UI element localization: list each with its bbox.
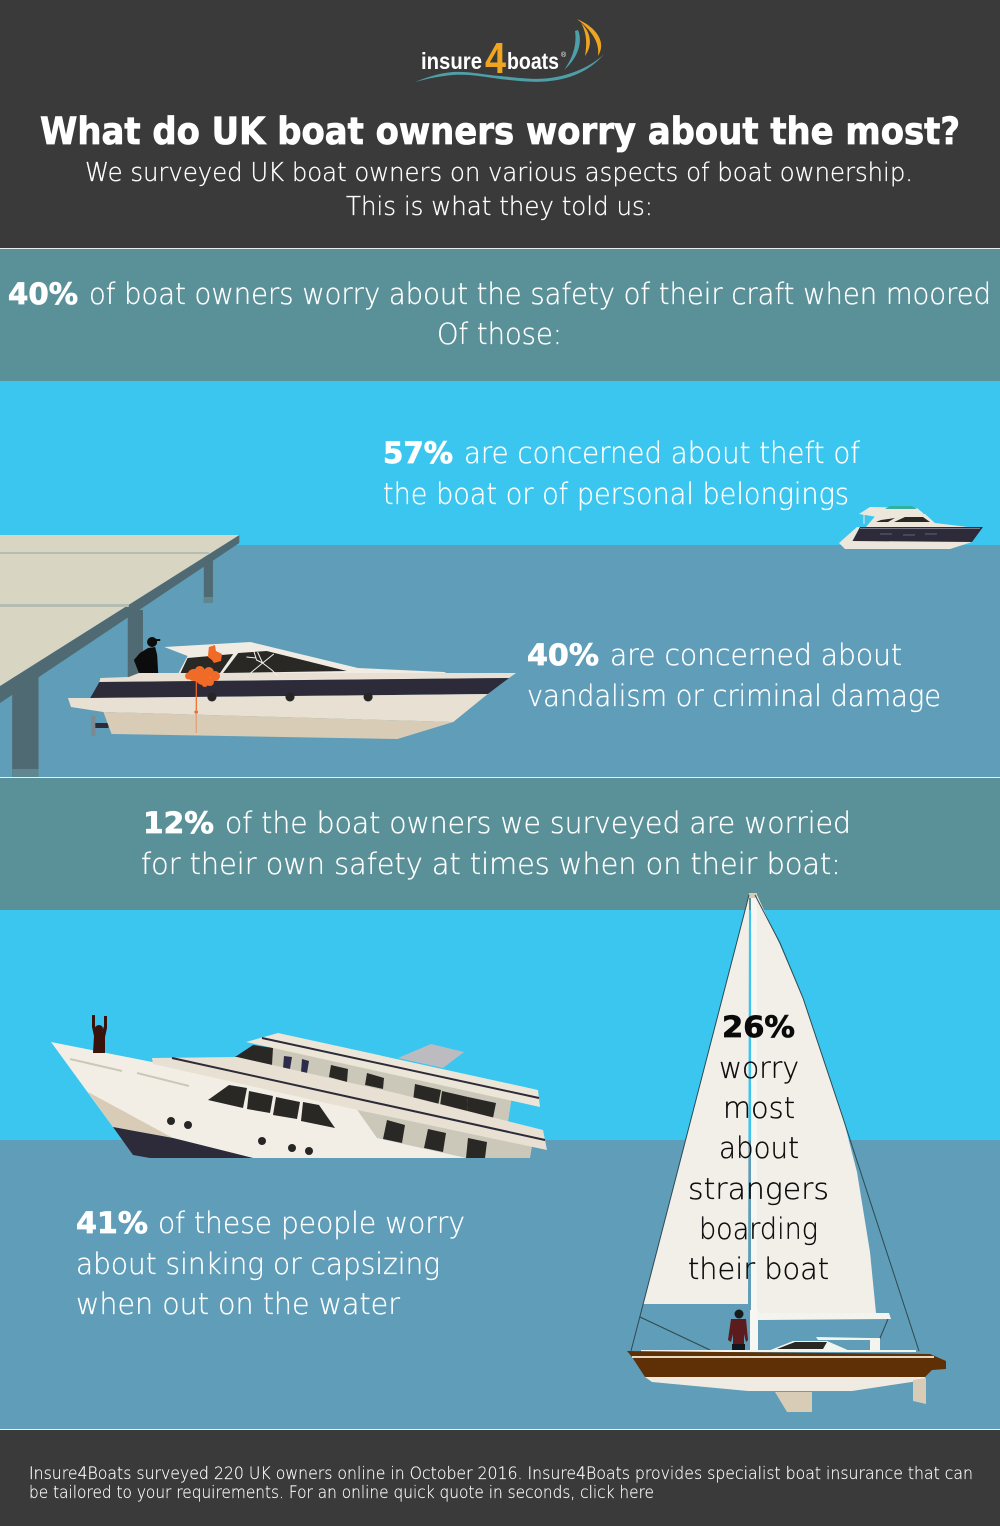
- text: 12% personal safety: for their own safety at times when on their boat:: [141, 847, 841, 881]
- panel: footer: [0, 1430, 1000, 1526]
- text: 40% vandalism: are concerned about: [610, 638, 902, 672]
- panel: personal safety band: [0, 778, 1000, 910]
- sail: main: [751, 895, 876, 1313]
- text: 41% sinking: 41%: [76, 1206, 148, 1240]
- text: 26% strangers boarding: boarding: [699, 1212, 818, 1246]
- text: 40% worry when moored: Of those:: [437, 317, 562, 351]
- icon: distant motor yacht: [839, 506, 983, 549]
- logo: insure4boats: 4: [485, 34, 506, 83]
- icon: smashed window cracks: [246, 650, 278, 676]
- intro text: [85, 158, 913, 222]
- text: 26% strangers boarding: about: [719, 1131, 799, 1165]
- text: survey note: be tailored to your requirements. For an online quick quote in seconds, click here: [29, 1483, 654, 1503]
- text: 41% sinking: of these people worry: [158, 1206, 465, 1240]
- icon: vandal silhouette: [134, 637, 160, 673]
- text: 40% vandalism: 40%: [527, 638, 599, 672]
- text: 57% theft: the boat or of personal belongings: [383, 477, 849, 511]
- text: 26% strangers boarding: most: [723, 1091, 795, 1125]
- text: 26% strangers boarding: [688, 1010, 829, 1286]
- text: 40% vandalism: [527, 638, 941, 713]
- icon: person on deck: [728, 1310, 748, 1350]
- text: 12% personal safety: of the boat owners we surveyed are worried: [225, 806, 851, 840]
- text: 57% theft: are concerned about theft of: [464, 436, 861, 470]
- intro text: We surveyed UK boat owners on various aspects of boat ownership.: [85, 158, 913, 188]
- text: 41% sinking: [76, 1206, 465, 1321]
- text: survey note: [29, 1464, 973, 1503]
- panel: at sea scene: [0, 893, 1000, 1429]
- illustration: sailing yacht: [627, 893, 946, 1412]
- text: 41% sinking: about sinking or capsizing: [76, 1247, 440, 1281]
- panel: moored safety band: [0, 249, 1000, 381]
- logo: insure4boats: [415, 19, 604, 83]
- text: 57% theft: 57%: [383, 436, 453, 470]
- illustration: sinking yacht: [51, 1015, 547, 1158]
- text: 40% vandalism: vandalism or criminal damage: [527, 679, 941, 713]
- illustration: pier: [0, 535, 239, 777]
- icon: person waving for help: [92, 1015, 107, 1053]
- intro text: This is what they told us:: [346, 192, 653, 222]
- logo: insure4boats: insure: [421, 48, 482, 74]
- text: 26% strangers boarding: 26%: [722, 1010, 795, 1044]
- text: 41% sinking: when out on the water: [76, 1287, 400, 1321]
- logo: insure4boats: ®: [561, 51, 567, 59]
- text: 40% worry when moored: 40%: [8, 277, 78, 311]
- text: 26% strangers boarding: their boat: [688, 1252, 829, 1286]
- panel: moored scene: [0, 381, 1000, 777]
- text: 40% worry when moored: [8, 277, 991, 351]
- text: 12% personal safety: 12%: [143, 806, 214, 840]
- text: 57% theft: [383, 436, 861, 511]
- text: 12% personal safety: [141, 806, 851, 881]
- logo: insure4boats: boats: [507, 48, 559, 74]
- sail: jib: [643, 896, 749, 1304]
- illustration: vandalised motor boat: [68, 637, 516, 739]
- text: 26% strangers boarding: strangers: [688, 1172, 829, 1206]
- panel: header background: [0, 0, 1000, 248]
- icon: orange paint splatter: [185, 645, 222, 733]
- text: 26% strangers boarding: worry: [719, 1051, 799, 1085]
